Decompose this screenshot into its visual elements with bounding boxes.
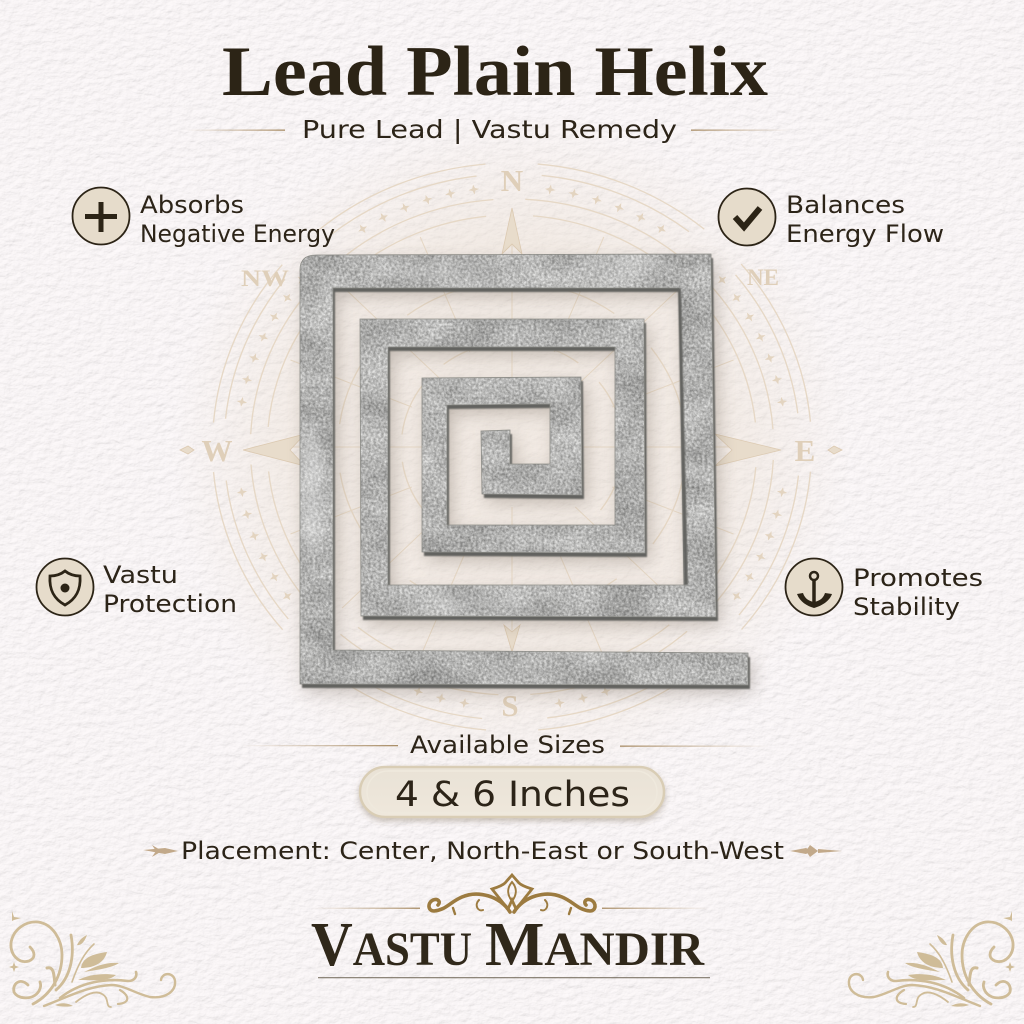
compass rose background: NW [241,266,289,291]
compass rose background: NE [747,265,779,290]
logo wordmark: MANDIR [485,911,705,979]
icon: anchor [786,558,842,616]
feature: vastu protection: Protection [103,590,237,618]
compass rose background: W [202,433,232,468]
size pill [360,767,664,817]
icon: check mark [718,188,776,246]
logo wordmark [311,911,705,979]
corner flourish: left [9,911,175,1007]
warm glow behind compass [170,110,854,790]
subtitle with side rules: Pure Lead | Vastu Remedy [302,115,677,144]
lead spiral helix [300,254,753,693]
compass rose background: S [501,688,519,723]
arrow: right ornament [790,845,842,857]
size pill: 4 & 6 Inches [395,775,630,815]
logo wordmark: VASTU [311,911,472,979]
feature: absorbs negative energy: Absorbs [140,191,244,219]
arrow: left ornament [143,845,178,857]
logo underline [318,977,710,978]
feature: balances energy flow: Energy Flow [786,220,944,248]
icon: shield [36,558,94,616]
feature: vastu protection [36,558,237,618]
available sizes heading: Available Sizes [410,731,605,759]
compass rose background: E [795,433,815,468]
feature: promotes stability [786,558,983,621]
feature: promotes stability: Promotes [853,564,983,592]
icon: plus [72,188,130,244]
title: Lead Plain Helix [222,33,769,111]
feature: promotes stability: Stability [853,593,960,621]
feature: balances energy flow [718,188,944,248]
corner flourish: right [849,911,1015,1007]
logo ornament [312,875,710,914]
feature: balances energy flow: Balances [786,191,905,219]
compass rose background: N [501,163,523,198]
placement line: Placement: Center, North-East or South-West [181,837,784,865]
feature: absorbs negative energy: Negative Energy [140,220,335,248]
compass rose background [180,163,842,731]
feature: absorbs negative energy [72,188,335,248]
feature: vastu protection: Vastu [103,561,178,589]
